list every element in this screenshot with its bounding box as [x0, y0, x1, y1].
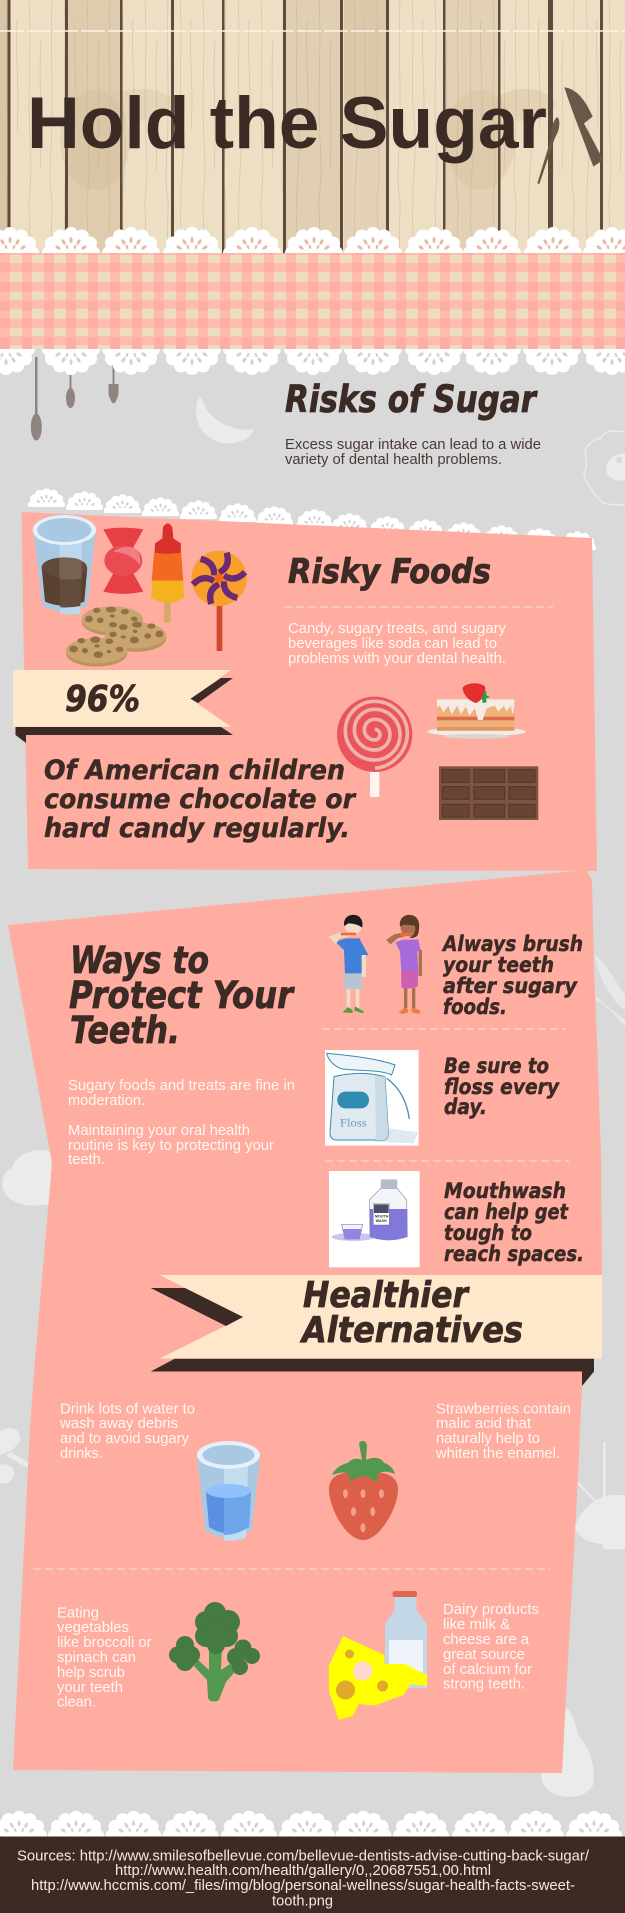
big statement text: Of American children — [44, 755, 345, 786]
tip: floss: day. — [444, 1095, 487, 1119]
icon group: sweets — [33, 515, 247, 667]
icon group: lollipop, cake, chocolate — [337, 683, 538, 820]
vegetable text: like broccoli or — [57, 1635, 152, 1651]
divider — [284, 606, 553, 608]
tip: mouthwash: Mouthwash — [444, 1179, 566, 1203]
dairy text: of calcium for — [443, 1662, 532, 1678]
tip: brush — [441, 932, 583, 1019]
water text: and to avoid sugary — [60, 1431, 190, 1447]
icon: cookies — [66, 606, 166, 667]
heading: Ways to Protect Your Teeth: Teeth. — [70, 1009, 180, 1052]
protect teeth text: routine is key to protecting your — [68, 1138, 274, 1154]
ribbon: 96%: 96% — [65, 679, 140, 720]
tip: brush: your teeth — [443, 953, 554, 977]
ribbon: Healthier Alternatives: Alternatives — [299, 1310, 523, 1351]
tip: mouthwash: can help get — [444, 1200, 569, 1224]
small lace row behind panel — [28, 488, 596, 560]
protect teeth text: Maintaining your oral health — [68, 1123, 250, 1139]
tip: floss: Be sure to — [444, 1054, 549, 1078]
panel: ways to protect your teeth and alternatives background — [8, 870, 602, 1773]
tip: floss — [444, 1054, 560, 1119]
icon: mouthwash: WASH — [376, 1219, 387, 1223]
divider — [322, 1028, 566, 1030]
footer: sources: Sources: http://www.smilesofbellevue.com/bellevue-dentists-advise-cutting-back-sugar/ — [17, 1848, 590, 1865]
decorative background food silhouettes — [0, 396, 625, 1797]
strawberry text: whiten the enamel. — [435, 1446, 560, 1462]
dairy text: cheese are a — [443, 1632, 530, 1648]
protect teeth text: teeth. — [68, 1152, 105, 1168]
icon: cake slice — [427, 683, 526, 739]
tip: floss: floss every — [444, 1075, 560, 1099]
icon: dental floss: Floss — [340, 1116, 367, 1130]
water text: Drink lots of water to — [60, 1402, 195, 1418]
intro text: variety of dental health problems. — [285, 452, 502, 468]
heading: Ways to Protect Your Teeth: Ways to — [70, 939, 209, 982]
water text: drinks. — [60, 1446, 103, 1462]
dairy text: Dairy products — [443, 1602, 539, 1618]
icon: mouthwash: MOUTH — [375, 1215, 389, 1219]
protect teeth text: moderation. — [68, 1093, 145, 1109]
vegetable text: Eating — [57, 1606, 99, 1622]
ribbon: Healthier Alternatives — [151, 1275, 602, 1386]
tip: brush: after sugary — [443, 974, 578, 998]
strawberry text: malic acid that — [436, 1416, 531, 1432]
tip: brush: foods. — [443, 995, 507, 1019]
divider — [33, 1568, 550, 1570]
icon: mouthwash — [329, 1171, 420, 1267]
water text — [59, 1402, 195, 1462]
dairy text: strong teeth. — [443, 1677, 525, 1693]
footer: sources: tooth.png — [272, 1892, 333, 1910]
footer: sources — [0, 1836, 625, 1913]
icon: broccoli — [169, 1602, 260, 1702]
icon: children brushing teeth — [328, 915, 422, 1014]
lace trim below gingham — [0, 330, 625, 375]
heading: Ways to Protect Your Teeth: Protect Your — [69, 974, 295, 1017]
footer: sources: http://www.health.com/health/gallery/0,,20687551,00.html — [115, 1862, 491, 1879]
divider — [325, 1160, 569, 1162]
icon: popsicle — [151, 523, 184, 623]
stitched dashed line — [0, 30, 625, 32]
vegetable text: clean. — [57, 1694, 96, 1710]
risky foods text: beverages like soda can lead to — [288, 636, 497, 652]
lace trim above footer — [0, 1811, 622, 1854]
wood plank header — [0, 0, 625, 255]
risky foods text — [288, 621, 507, 667]
dairy text — [443, 1602, 539, 1693]
vegetable text — [57, 1606, 152, 1710]
icon: milk and cheese — [329, 1591, 427, 1720]
gingham band — [0, 253, 625, 349]
risky foods text: Candy, sugary treats, and sugary — [288, 621, 507, 637]
icon: dental floss — [325, 1050, 419, 1146]
big statement text: hard candy regularly. — [44, 813, 350, 844]
water text: wash away debris — [59, 1416, 178, 1432]
ribbon: 96% — [13, 670, 233, 743]
tip: mouthwash — [444, 1179, 584, 1266]
title: Hold the Sugar — [27, 83, 547, 164]
icon: glass of cola — [33, 515, 96, 615]
panel: risky foods — [22, 512, 597, 871]
tip: mouthwash: tough to — [444, 1221, 532, 1245]
tip: mouthwash: reach spaces. — [444, 1242, 584, 1266]
protect teeth text: Sugary foods and treats are fine in — [68, 1078, 295, 1094]
icon: swirl lollipop — [191, 551, 247, 651]
big statement text: consume chocolate or — [44, 784, 357, 815]
vegetable text: your teeth — [57, 1680, 123, 1696]
vegetable text: spinach can — [57, 1650, 136, 1666]
icon group: floss and mouthwash — [325, 1050, 420, 1267]
icon: fork and knife — [537, 87, 603, 184]
icon: glass of water — [197, 1441, 260, 1541]
heading: Risky Foods: Risky Foods — [288, 552, 491, 592]
intro text: Excess sugar intake can lead to a wide — [285, 437, 541, 453]
strawberry text: naturally help to — [436, 1431, 540, 1447]
icon: spiral lollipop — [337, 697, 412, 797]
intro text — [285, 437, 541, 468]
dairy text: like milk & — [443, 1617, 510, 1633]
protect teeth text — [68, 1078, 295, 1168]
heading: Ways to Protect Your Teeth — [69, 939, 295, 1052]
footer: sources: http://www.hccmis.com/_files/img/blog/personal-wellness/sugar-health-facts-sweet- — [31, 1877, 575, 1894]
big statement text — [44, 755, 357, 844]
strawberry text — [435, 1402, 571, 1462]
strawberry text: Strawberries contain — [436, 1402, 571, 1418]
icon: strawberry — [329, 1441, 398, 1540]
vegetable text: vegetables — [57, 1620, 129, 1636]
dairy text: great source — [443, 1647, 525, 1663]
risky foods text: problems with your dental health. — [288, 651, 506, 667]
tip: brush: Always brush — [441, 932, 583, 956]
icon: wrapped candy — [103, 528, 143, 594]
icon: chocolate bar — [439, 766, 538, 820]
heading: Risks of Sugar: Risks of Sugar — [285, 378, 538, 421]
lace trim above gingham — [0, 227, 625, 272]
vegetable text: help scrub — [57, 1665, 125, 1681]
cutlery hanging — [31, 357, 118, 440]
ribbon: Healthier Alternatives: Healthier — [303, 1275, 470, 1316]
